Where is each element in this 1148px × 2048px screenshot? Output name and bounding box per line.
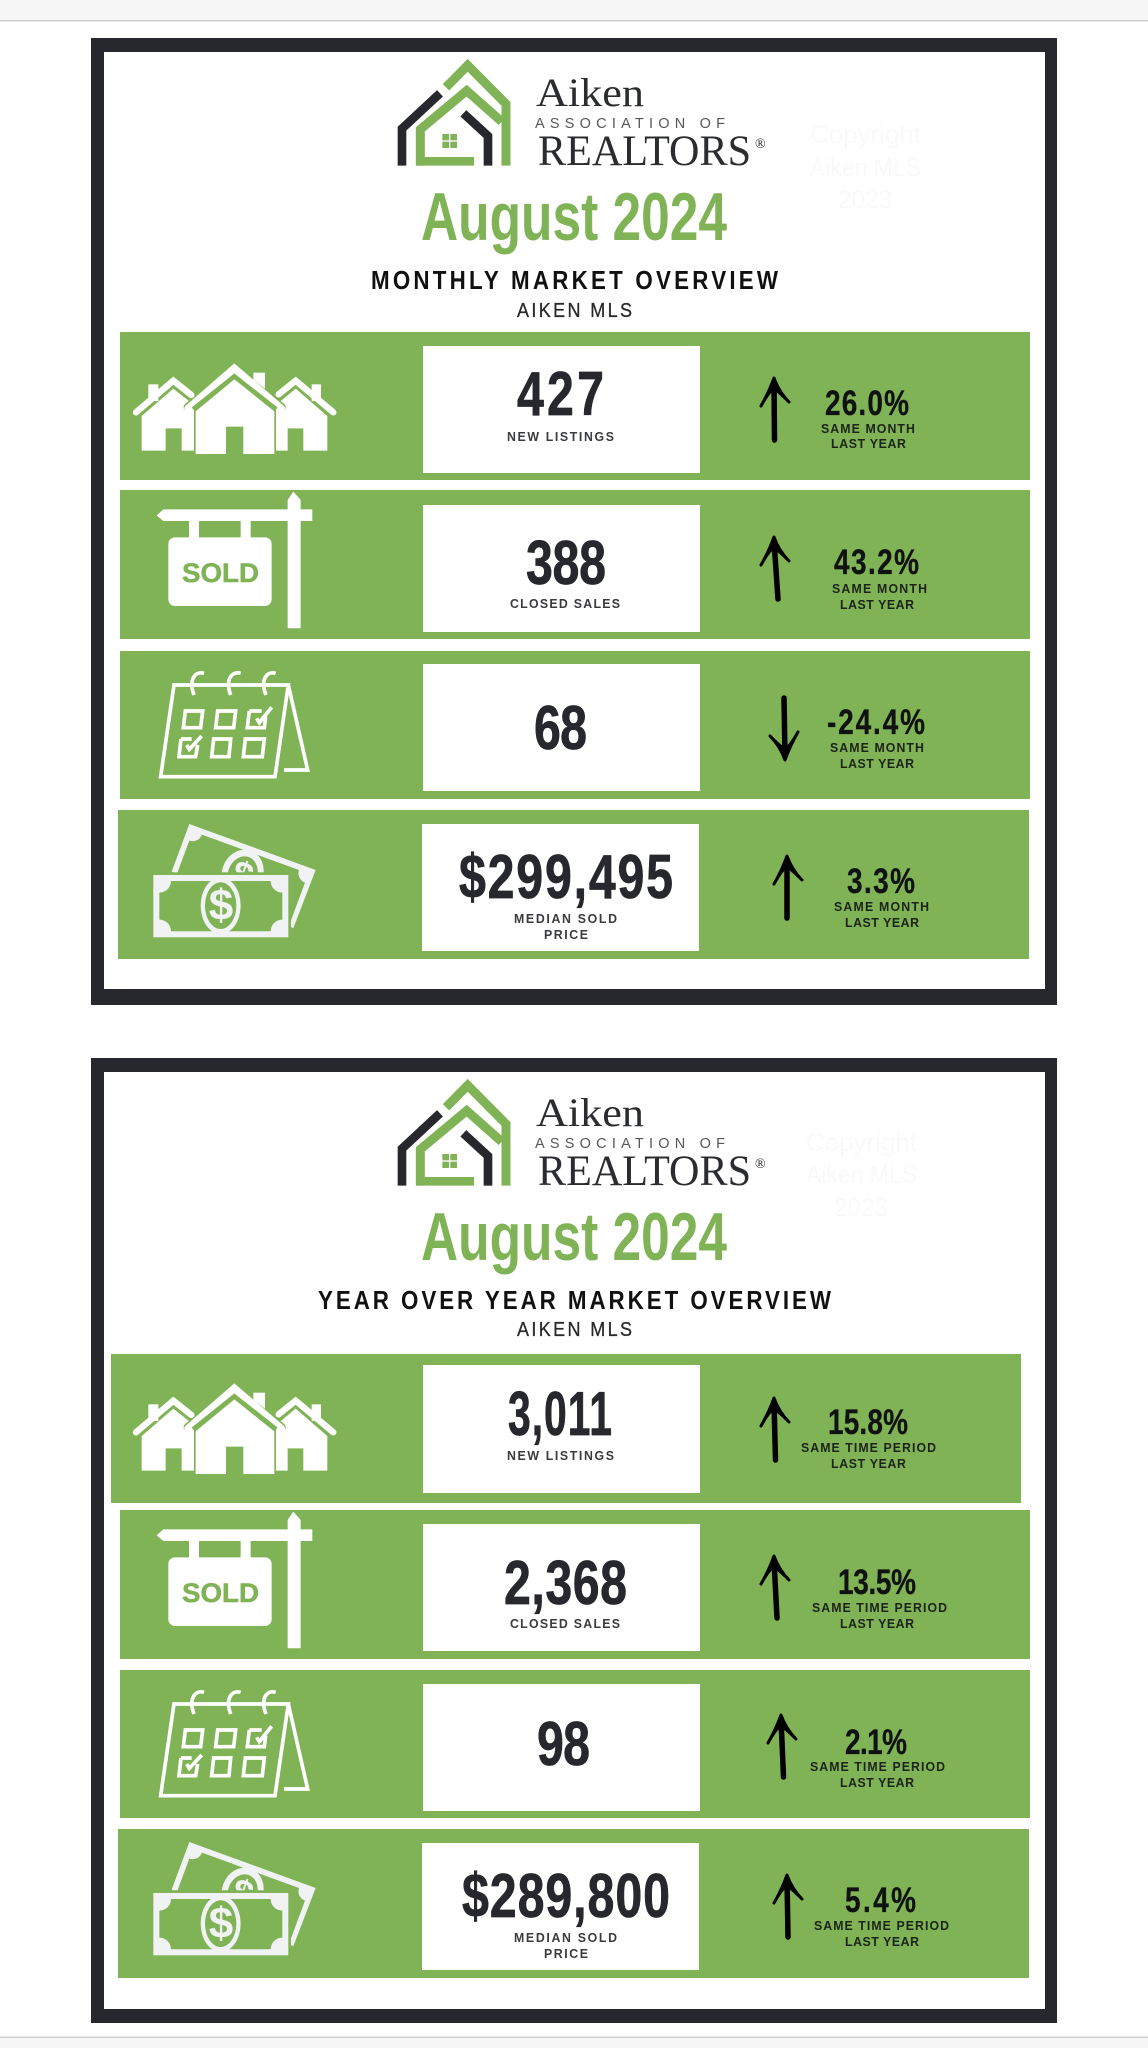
title: August 2024 — [421, 1199, 727, 1275]
stat box — [422, 824, 699, 951]
comparison label: SAME MONTH — [832, 582, 927, 596]
watermark: copyright: 2023 — [838, 186, 892, 214]
icon: sold sign: SOLD — [182, 558, 259, 588]
stat box — [423, 346, 700, 473]
comparison label: SAME TIME PERIOD — [812, 1601, 947, 1615]
icon: sold sign — [157, 492, 312, 628]
logo: Aiken Association of Realtors: ® — [755, 1157, 766, 1172]
comparison label — [834, 900, 929, 930]
watermark: copyright: 2023 — [834, 1194, 888, 1222]
stat box — [423, 664, 700, 791]
logo: Aiken Association of Realtors — [402, 65, 766, 175]
comparison label — [821, 422, 915, 451]
watermark: copyright — [810, 121, 921, 214]
row: closed sales — [120, 490, 1030, 639]
row: days on market — [120, 651, 1030, 799]
logo: Aiken Association of Realtors: REALTORS — [538, 128, 751, 175]
row: days on market — [120, 1670, 1030, 1818]
arrow: up — [761, 1556, 789, 1618]
stat box — [423, 1524, 700, 1651]
icon: money: $ — [209, 881, 233, 930]
arrow: up — [768, 1715, 796, 1777]
watermark: copyright: Aiken MLS — [810, 154, 921, 182]
label: NEW LISTINGS — [507, 430, 614, 444]
arrow: up — [761, 1398, 789, 1460]
logo: Aiken Association of Realtors: Aiken — [536, 70, 644, 115]
change value: 3.3% — [847, 861, 915, 901]
arrow: up — [761, 537, 789, 599]
comparison label: SAME MONTH — [821, 422, 915, 436]
change value: 2.1% — [845, 1722, 907, 1762]
change value: 26.0% — [825, 383, 909, 423]
logo: Aiken Association of Realtors: REALTORS — [538, 1148, 751, 1195]
heading: YEAR OVER YEAR MARKET OVERVIEW — [318, 1286, 831, 1315]
icon: money: $ — [226, 1870, 259, 1916]
stat box — [423, 1684, 700, 1811]
value: 388 — [526, 528, 606, 597]
comparison label — [810, 1760, 945, 1790]
title: August 2024 — [421, 179, 727, 255]
comparison label: LAST YEAR — [845, 916, 919, 930]
comparison label: SAME TIME PERIOD — [801, 1441, 936, 1455]
comparison label: LAST YEAR — [840, 757, 914, 771]
icon: money: $ — [226, 852, 259, 898]
icon: houses — [136, 1389, 333, 1474]
row: median sold price — [118, 810, 1029, 959]
comparison label — [801, 1441, 936, 1471]
icon: houses — [136, 369, 333, 454]
comparison label — [832, 582, 927, 612]
watermark: copyright: Aiken MLS — [806, 1161, 917, 1189]
comparison label: LAST YEAR — [831, 1457, 906, 1471]
comparison label: SAME MONTH — [830, 741, 924, 755]
panel: monthly market overview — [91, 38, 1057, 1005]
row: new listings — [111, 1354, 1021, 1503]
logo: Aiken Association of Realtors: ASSOCIATION OF — [535, 1136, 725, 1152]
watermark: copyright: Copyright — [810, 121, 921, 149]
subheading: AIKEN MLS — [517, 1319, 632, 1341]
logo: Aiken Association of Realtors — [402, 1085, 766, 1195]
comparison label: LAST YEAR — [831, 437, 906, 451]
value: $289,800 — [462, 1861, 670, 1930]
arrow: up — [774, 1875, 802, 1937]
comparison label: SAME TIME PERIOD — [810, 1760, 945, 1774]
change value: 43.2% — [834, 542, 919, 582]
value: 427 — [517, 359, 604, 428]
arrow: up — [761, 378, 789, 440]
icon: calendar — [161, 1692, 308, 1796]
value: 3,011 — [508, 1380, 612, 1449]
change value: 13.5% — [838, 1562, 916, 1602]
icon: money — [151, 824, 316, 940]
icon: money: $ — [209, 1899, 233, 1948]
comparison label: LAST YEAR — [840, 1617, 914, 1631]
row: median sold price — [118, 1829, 1029, 1978]
label: CLOSED SALES — [510, 1617, 620, 1631]
comparison label: LAST YEAR — [840, 598, 914, 612]
label — [514, 1931, 617, 1961]
icon: money — [151, 1842, 316, 1958]
change value: 15.8% — [828, 1402, 908, 1442]
comparison label — [812, 1601, 947, 1631]
comparison label — [814, 1919, 949, 1949]
change value: -24.4% — [827, 702, 925, 742]
logo: Aiken Association of Realtors: Aiken — [536, 1090, 644, 1135]
label: PRICE — [544, 1947, 588, 1961]
value: 68 — [534, 693, 587, 762]
label: PRICE — [544, 928, 588, 942]
row: closed sales — [120, 1510, 1030, 1659]
stat box — [423, 505, 700, 632]
arrow: down — [770, 698, 798, 760]
comparison label: LAST YEAR — [845, 1935, 919, 1949]
label: NEW LISTINGS — [507, 1449, 614, 1463]
stat box — [423, 1365, 700, 1493]
label — [514, 912, 617, 942]
value: 98 — [537, 1709, 590, 1778]
row: new listings — [120, 332, 1030, 480]
icon: sold sign — [157, 1512, 312, 1648]
subheading: AIKEN MLS — [517, 300, 632, 322]
label: MEDIAN SOLD — [514, 912, 617, 926]
change value: 5.4% — [845, 1880, 916, 1920]
logo: Aiken Association of Realtors: ® — [755, 137, 766, 152]
arrow: up — [774, 856, 802, 918]
label: MEDIAN SOLD — [514, 1931, 617, 1945]
comparison label: SAME TIME PERIOD — [814, 1919, 949, 1933]
stat box — [422, 1843, 699, 1970]
watermark: copyright: Copyright — [806, 1129, 917, 1157]
value: 2,368 — [504, 1548, 627, 1617]
panel: year over year market overview — [91, 1058, 1057, 2023]
label: CLOSED SALES — [510, 597, 620, 611]
value: $299,495 — [459, 842, 673, 911]
comparison label: SAME MONTH — [834, 900, 929, 914]
comparison label — [830, 741, 924, 771]
icon: sold sign: SOLD — [182, 1578, 259, 1608]
logo: Aiken Association of Realtors: ASSOCIATION OF — [535, 116, 725, 132]
heading: MONTHLY MARKET OVERVIEW — [371, 266, 778, 295]
icon: calendar — [161, 673, 308, 777]
comparison label: LAST YEAR — [840, 1776, 914, 1790]
watermark: copyright — [806, 1129, 917, 1222]
